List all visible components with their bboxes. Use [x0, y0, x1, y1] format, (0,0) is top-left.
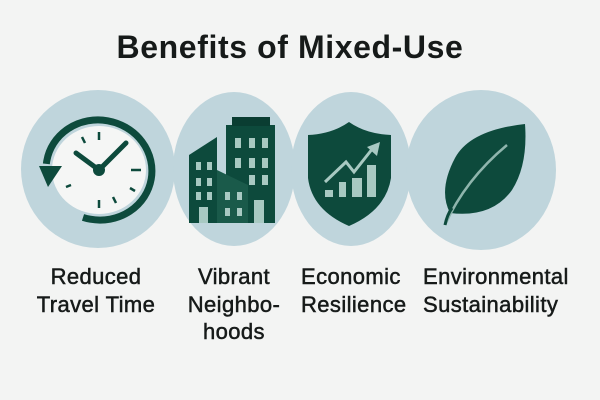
- icon: buildings: [189, 117, 275, 223]
- label: economic resilience: Resilience: [301, 292, 406, 316]
- label: vibrant neighborhoods: [188, 264, 280, 344]
- circle: clock: [21, 90, 175, 248]
- label: vibrant neighborhoods: Neighbo-: [188, 292, 280, 316]
- title: Benefits of Mixed-Use: [117, 29, 463, 65]
- label: environmental sustainability: Environmental: [423, 264, 569, 289]
- circle: shield: [291, 92, 411, 246]
- icon: clock: [38, 112, 160, 228]
- label: vibrant neighborhoods: hoods: [203, 319, 265, 344]
- icon: leaf: [445, 124, 525, 225]
- circle: building: [173, 92, 295, 246]
- label: economic resilience: Economic: [301, 264, 401, 289]
- label: economic resilience: [301, 264, 406, 316]
- label: reduced travel time: [37, 264, 155, 316]
- label: reduced travel time: Reduced: [51, 264, 141, 289]
- label: environmental sustainability: [423, 264, 569, 317]
- label: vibrant neighborhoods: Vibrant: [198, 264, 270, 289]
- circle: leaf: [406, 90, 556, 250]
- icon: shield: [308, 122, 391, 226]
- label: environmental sustainability: Sustainability: [423, 292, 558, 316]
- label: reduced travel time: Travel Time: [37, 292, 155, 316]
